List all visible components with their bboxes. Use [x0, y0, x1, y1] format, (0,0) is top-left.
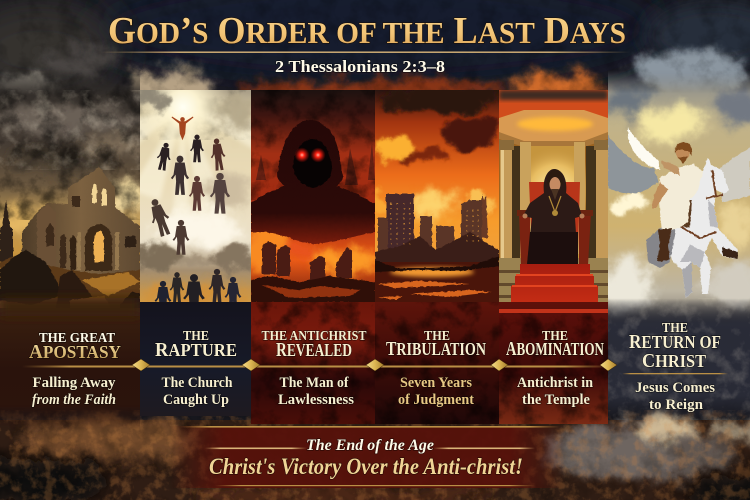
text area: the tribulation: TRIBULATION	[386, 338, 486, 360]
text area: the great apostasy: from the Faith	[32, 392, 116, 408]
title: GOD’S ORDER OF THE LAST DAYS	[108, 10, 626, 52]
text area: the rapture: RAPTURE	[155, 339, 237, 361]
text area: the tribulation	[375, 302, 499, 424]
image: hooded figure with glowing eyes over a burning city	[251, 90, 375, 302]
text area: the rapture: The Church	[162, 375, 233, 391]
arrow diamonds between columns	[132, 359, 617, 371]
text area: the great apostasy: APOSTASY	[29, 341, 121, 363]
panel: the great apostasy	[0, 72, 140, 428]
text area: the great apostasy: THE GREAT	[39, 331, 116, 346]
scripture reference: 2 Thessalonians 2:3–8	[275, 57, 445, 76]
text area: the great apostasy	[0, 298, 140, 430]
text area: the rapture: THE	[183, 329, 209, 344]
text area: the abomination	[499, 302, 608, 424]
image: antichrist on a throne in the temple	[498, 90, 610, 302]
title block	[100, 10, 630, 76]
horse	[667, 158, 738, 298]
text area: the abomination: the Temple	[522, 392, 590, 408]
text area: the abomination: THE	[542, 329, 568, 344]
text area: the return of christ: CHRIST	[642, 350, 706, 372]
text area: the return of christ: RETURN OF	[629, 331, 721, 353]
text area: the antichrist revealed: REVEALED	[276, 339, 352, 361]
banner slogan: Christ's Victory Over the Anti-christ!	[209, 454, 523, 479]
text area: the abomination: ABOMINATION	[506, 338, 604, 360]
text area: the antichrist revealed	[251, 302, 375, 424]
text area: the return of christ	[608, 298, 750, 420]
banner heading: The End of the Age	[306, 437, 434, 454]
title rule	[100, 52, 630, 53]
text area: the great apostasy: Falling Away	[32, 375, 116, 391]
image: figures rising into the light	[140, 90, 251, 302]
enthroned figure	[523, 169, 582, 264]
banner: end of the age	[170, 426, 565, 488]
panel: the abomination	[498, 90, 610, 424]
text area: the return of christ: Jesus Comes	[635, 380, 715, 396]
text area: the tribulation: THE	[424, 329, 450, 344]
text area: the abomination: Antichrist in	[517, 375, 594, 391]
image: ruined church under storm clouds	[0, 72, 140, 308]
image: rider on a white horse among clouds	[601, 70, 750, 330]
text area: the tribulation: of Judgment	[398, 392, 474, 408]
rider	[658, 164, 703, 232]
text area: the antichrist revealed: THE ANTICHRIST	[262, 329, 367, 344]
text area: the antichrist revealed: Lawlessness	[278, 392, 354, 408]
text area: the return of christ: to Reign	[649, 397, 704, 413]
panel: the antichrist revealed	[251, 90, 375, 424]
panel: the return of christ	[601, 70, 750, 420]
panel: the rapture	[140, 90, 251, 416]
text area: the rapture: Caught Up	[163, 392, 229, 408]
divider rule across the columns	[22, 366, 612, 368]
bottom clouds	[0, 420, 750, 500]
wings	[608, 135, 658, 193]
text area: the rapture	[140, 302, 251, 416]
text area: the return of christ: THE	[662, 321, 688, 336]
image: city skyline engulfed in flames	[368, 89, 500, 302]
panel: the tribulation	[368, 89, 500, 424]
text area: the tribulation: Seven Years	[400, 375, 472, 391]
text area: the antichrist revealed: The Man of	[280, 375, 349, 391]
